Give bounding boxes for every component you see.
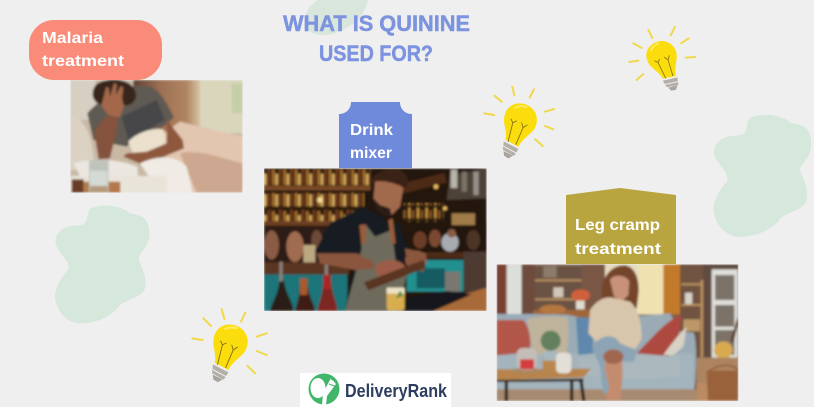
decorative blob: right (714, 115, 811, 237)
logo: DeliveryRank (300, 373, 451, 407)
badge: Drink mixer: mixer (350, 145, 392, 162)
icon: light bulb top right (629, 27, 695, 96)
table (497, 369, 591, 380)
badge: Malaria treatment (29, 20, 162, 80)
badge: Leg cramp treatment (566, 188, 676, 264)
icon: logo fork and spoon (308, 374, 340, 405)
photo: man unwell in bed (70, 80, 243, 193)
photo: bartender mixing drink (264, 168, 487, 311)
badge: Leg cramp treatment: Leg cramp (575, 217, 660, 234)
badge: Leg cramp treatment: treatment (575, 241, 661, 258)
title: USED FOR? (319, 41, 433, 66)
badge: Drink mixer: Drink (350, 122, 393, 139)
badge: Drink mixer (339, 102, 412, 168)
decorative blob: left (55, 206, 149, 323)
badge: Malaria treatment: treatment (42, 53, 124, 70)
title (283, 11, 470, 66)
icon: light bulb centre (484, 87, 554, 163)
sofa (497, 313, 696, 390)
logo: DeliveryRank: DeliveryRank (345, 381, 448, 401)
woman (602, 265, 639, 308)
badge: Malaria treatment: Malaria (42, 30, 103, 47)
decorative blob: behind title (305, 0, 368, 35)
title: WHAT IS QUININE (283, 11, 470, 36)
icon: light bulb bottom left (192, 309, 267, 387)
photo: woman with leg cramp on sofa (497, 264, 738, 401)
